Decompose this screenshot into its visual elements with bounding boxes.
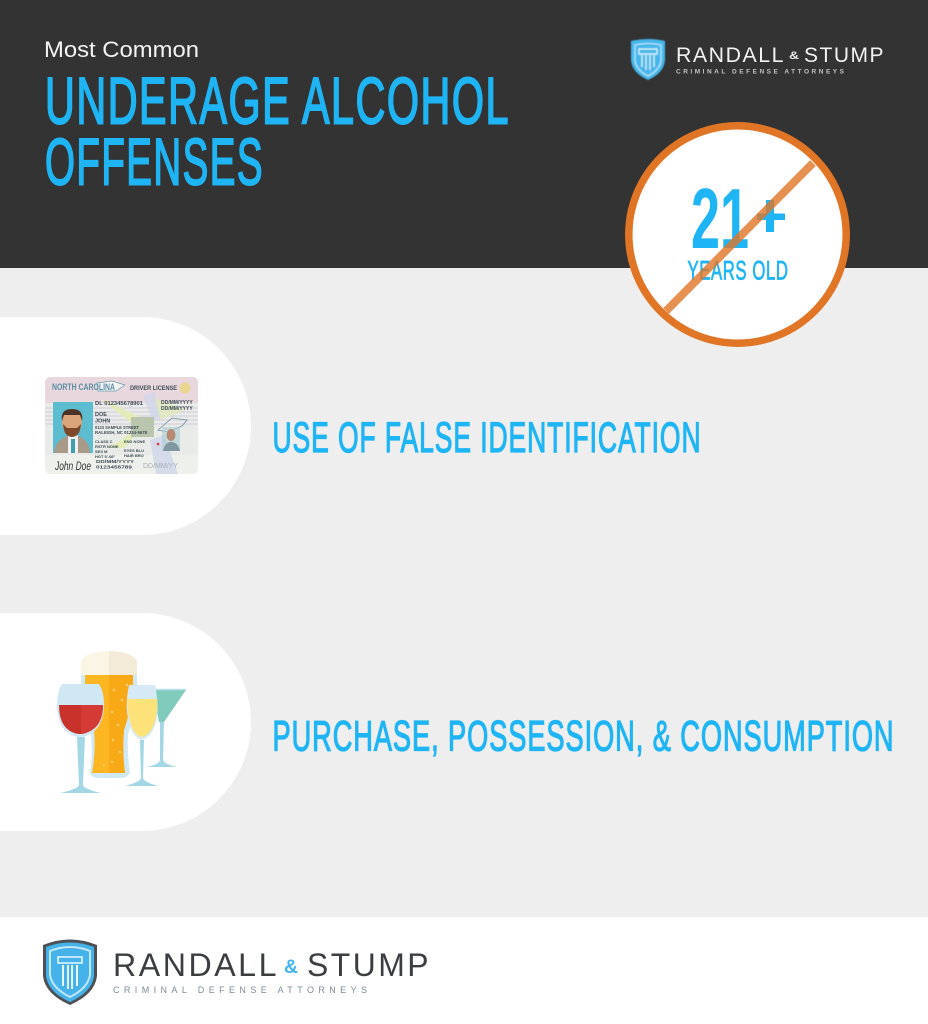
badge circle xyxy=(629,126,846,343)
logo wordmark: & xyxy=(789,50,799,62)
beer glass xyxy=(81,651,137,778)
panel background xyxy=(0,613,251,831)
id portrait xyxy=(53,402,93,453)
wine glass xyxy=(57,684,104,793)
header band xyxy=(0,0,928,268)
footer wordmark: RANDALL xyxy=(113,947,279,983)
footer tagline: CRIMINAL DEFENSE ATTORNEYS xyxy=(113,985,367,995)
icon: driver license: 0123456789 xyxy=(96,464,132,470)
footer logo xyxy=(43,940,431,1005)
icon: driver license xyxy=(45,377,198,474)
icon: driver license: DD/MM/YY xyxy=(143,463,178,470)
icon: driver license: 0123 SAMPLE STREET xyxy=(95,425,139,430)
icon: footer shield xyxy=(43,940,97,1005)
icon: driver license: JOHN xyxy=(95,418,110,424)
years old label: YEARS OLD xyxy=(688,256,788,286)
footer wordmark: & xyxy=(284,957,298,978)
icon: driver license: SEX M xyxy=(95,449,108,454)
panel: false identification xyxy=(0,317,251,535)
icon: driver license: DD/MM/YYYY xyxy=(161,406,193,412)
icon: driver license: RSTR NONE xyxy=(95,444,119,449)
icon: driver license: NORTH CAROLINA xyxy=(52,382,115,392)
header logo xyxy=(631,39,885,80)
age restriction badge xyxy=(629,126,846,343)
panel: purchase, possession, consumption xyxy=(0,613,251,831)
main title: UNDERAGE ALCOHOL xyxy=(45,64,510,138)
icon: driver license: END NONE xyxy=(124,439,145,444)
icon: driver license: DOE xyxy=(95,412,107,418)
panel background xyxy=(0,317,251,535)
footer band xyxy=(0,917,928,1024)
icon: driver license: HGT 5'-08" xyxy=(95,454,116,459)
plus sign xyxy=(757,200,785,232)
logo wordmark: RANDALL xyxy=(676,44,785,67)
footer wordmark: STUMP xyxy=(307,947,431,983)
logo wordmark: STUMP xyxy=(804,44,885,67)
icon: driver license: CLASS C xyxy=(95,439,113,444)
signature: John Doe xyxy=(54,459,91,473)
prohibition slash xyxy=(666,163,813,311)
icon: driver license: EYES BLU xyxy=(124,448,144,453)
icon: driver license: RALEIGH, NC 01234-5678 xyxy=(95,430,148,435)
21+ label: 21 xyxy=(691,172,749,267)
eyebrow heading: Most Common xyxy=(44,37,199,62)
champagne glass xyxy=(125,685,158,786)
footer wordmark xyxy=(113,947,431,983)
logo tagline: CRIMINAL DEFENSE ATTORNEYS xyxy=(676,68,845,76)
martini glass xyxy=(147,690,186,767)
icon: driver license: HAIR BRO xyxy=(124,453,144,458)
icon: driver license: DL 012345678901 xyxy=(95,401,143,407)
icon: driver license: DD/MM/YYYY xyxy=(161,400,193,406)
icon: header shield xyxy=(631,39,665,80)
main title xyxy=(45,64,510,198)
icon: driver license: DRIVER LICENSE xyxy=(130,386,177,392)
icon: alcoholic drinks xyxy=(57,651,186,793)
logo wordmark xyxy=(676,44,885,67)
icon: driver license: DD/MM/YYYY xyxy=(96,459,135,465)
main title: OFFENSES xyxy=(45,124,264,198)
